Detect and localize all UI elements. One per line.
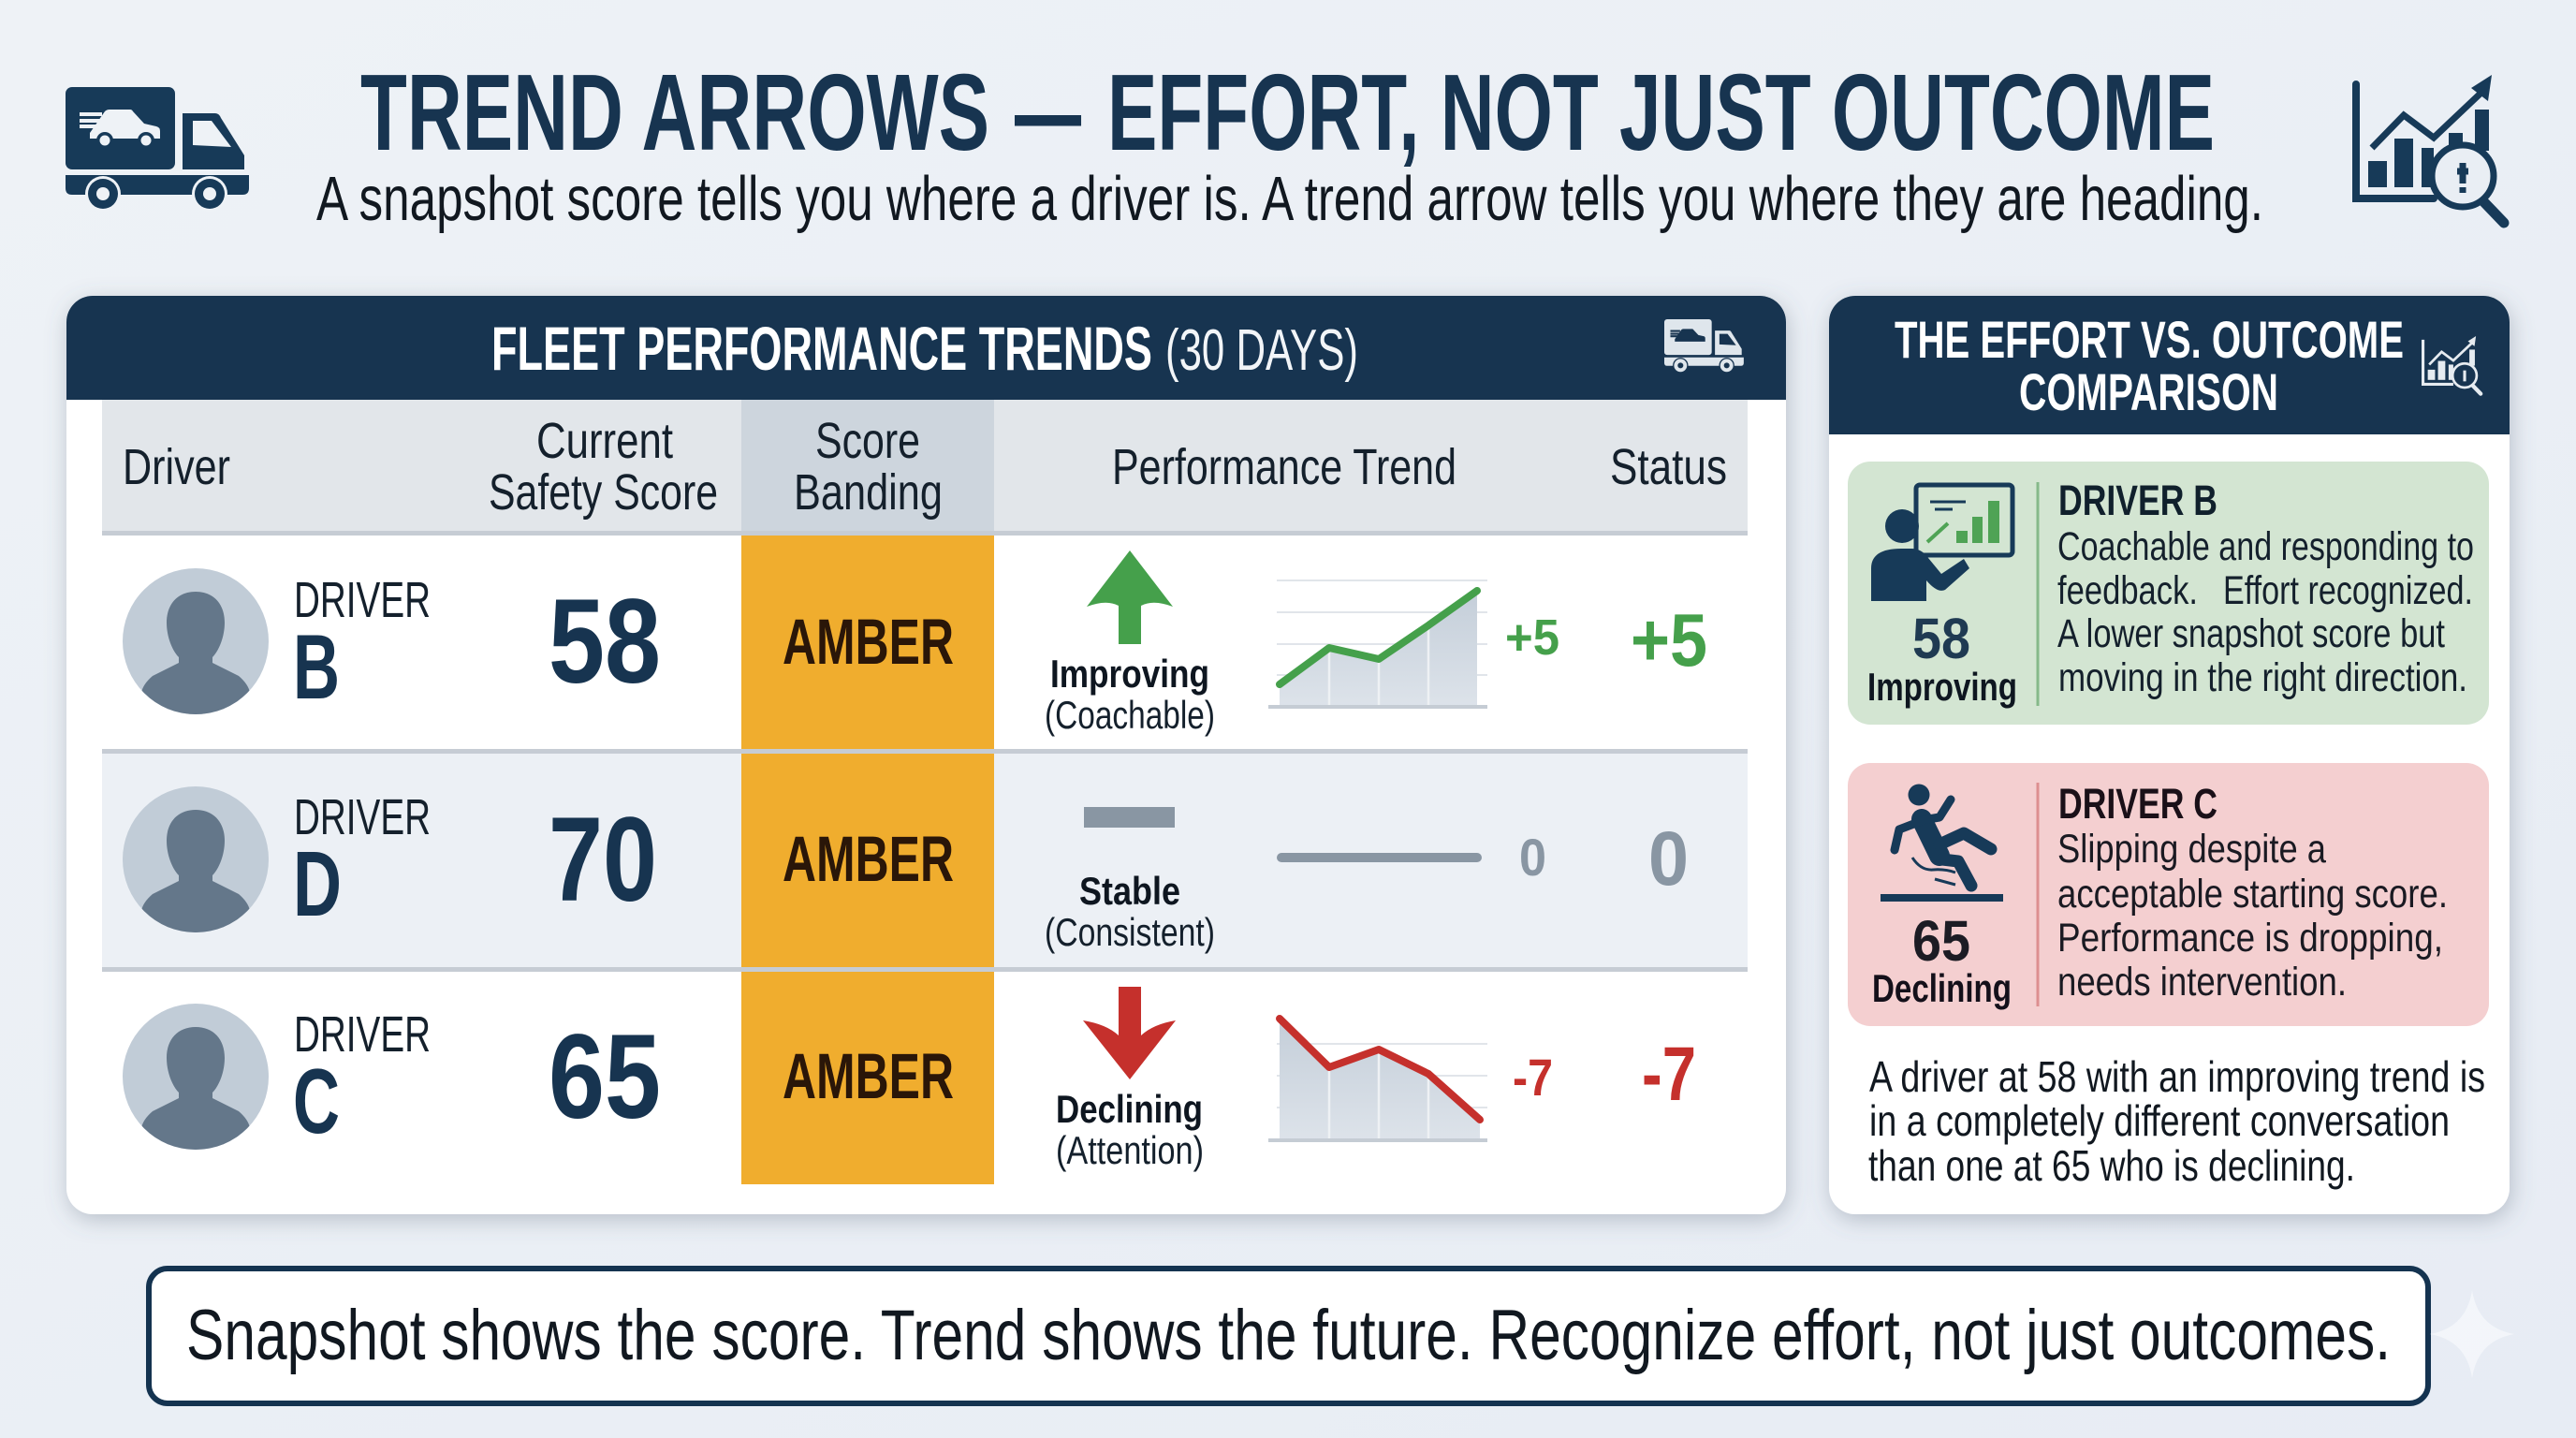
trend label: declining <box>1056 1087 1204 1172</box>
panel heading: COMPARISON <box>2019 362 2278 421</box>
driver C explanation: needs intervention. <box>2057 960 2347 1005</box>
footer callout <box>149 1269 2428 1403</box>
amber band: AMBER <box>783 606 954 678</box>
arrow: declining <box>1083 987 1176 1079</box>
avatar: driver B <box>123 568 269 721</box>
driver B name <box>293 572 431 718</box>
comparison summary text <box>1868 1052 2485 1190</box>
driver B name: DRIVER <box>294 572 431 628</box>
trend label: improving <box>1045 652 1215 737</box>
title: TREND ARROWS <box>360 51 989 173</box>
amber band <box>741 536 994 749</box>
icon: coach at board <box>1871 485 2012 601</box>
driver B name: B <box>293 615 340 718</box>
trend label: improving: (Coachable) <box>1045 693 1215 737</box>
trend label: declining: Declining <box>1056 1087 1203 1131</box>
trend label: improving: Improving <box>1050 652 1209 696</box>
comparison summary text: than one at 65 who is declining. <box>1868 1141 2355 1190</box>
score 65 label: 65 <box>1912 909 1970 973</box>
table header row <box>102 400 1748 536</box>
amber band <box>741 754 994 967</box>
arrow: stable dash <box>1084 807 1175 828</box>
score 70: 70 <box>549 793 657 927</box>
driver D name: DRIVER <box>294 789 431 845</box>
icon: sparkle <box>2430 1290 2514 1378</box>
status -7: -7 <box>1642 1032 1696 1117</box>
icon: person slipping <box>1881 785 2003 902</box>
driver C name <box>293 1006 431 1152</box>
table header row: Status <box>1610 439 1727 495</box>
driver C name: C <box>293 1049 340 1152</box>
sparkline: improving <box>1268 580 1487 707</box>
driver C name: DRIVER <box>294 1006 431 1063</box>
title <box>360 51 2215 173</box>
panel heading: FLEET PERFORMANCE TRENDS <box>491 314 1152 383</box>
trend label: stable: Stable <box>1079 869 1180 913</box>
card: driver C <box>1848 763 2489 1026</box>
trend label: stable <box>1045 869 1215 954</box>
panel heading <box>1895 310 2404 421</box>
sparkline: declining <box>1268 1019 1487 1140</box>
score 65 label <box>1872 909 2012 1010</box>
driver C explanation: DRIVER C <box>2058 780 2217 828</box>
delta -7: -7 <box>1513 1048 1553 1107</box>
status 0: 0 <box>1648 816 1689 902</box>
amber band: AMBER <box>783 823 954 895</box>
table header row: Driver <box>123 439 230 495</box>
driver D name <box>293 789 431 935</box>
trend label: declining: (Attention) <box>1056 1128 1204 1172</box>
driver B explanation: feedback. <box>2057 568 2198 613</box>
driver B explanation: A lower snapshot score but <box>2057 611 2445 656</box>
table header row: Score <box>815 413 920 469</box>
icon: small truck <box>1664 319 1744 374</box>
score 58: 58 <box>549 575 661 709</box>
driver C explanation: Performance is dropping, <box>2057 916 2443 961</box>
amber band: AMBER <box>783 1040 954 1112</box>
table header row: Performance Trend <box>1112 439 1456 495</box>
avatar: driver D <box>123 786 269 939</box>
icon: chart with magnifier <box>2356 75 2504 223</box>
panel heading: (30 DAYS) <box>1165 318 1358 383</box>
driver B explanation: Effort recognized. <box>2223 568 2473 613</box>
panel: fleet performance trends <box>66 296 1786 1214</box>
row: driver D <box>102 749 1748 972</box>
driver B explanation <box>2057 477 2474 700</box>
driver B explanation: moving in the right direction. <box>2058 655 2467 700</box>
delta +5: +5 <box>1505 609 1559 666</box>
panel: effort vs outcome comparison <box>1829 296 2510 1214</box>
score 58 label: Improving <box>1867 665 2017 709</box>
delta 0: 0 <box>1519 828 1546 887</box>
driver B explanation: DRIVER B <box>2058 477 2217 524</box>
driver D name: D <box>293 832 342 935</box>
icon: delivery truck <box>66 87 249 212</box>
arrow: improving <box>1087 550 1173 644</box>
score 58 label <box>1867 607 2017 709</box>
card: driver B <box>1848 462 2489 725</box>
amber band <box>741 972 994 1184</box>
driver B explanation: Coachable and responding to <box>2057 524 2474 569</box>
comparison summary text: in a completely different conversation <box>1869 1096 2450 1145</box>
row: driver C <box>123 972 1696 1184</box>
avatar: driver C <box>123 1004 269 1156</box>
table header row: Safety Score <box>489 464 718 521</box>
sparkline: stable <box>1281 853 1477 862</box>
icon: small chart with magnifier <box>2423 336 2481 394</box>
title: — <box>1015 51 1081 173</box>
score 65 label: Declining <box>1872 966 2012 1010</box>
status +5: +5 <box>1631 598 1707 682</box>
table header row: Current <box>536 413 673 469</box>
score 65: 65 <box>549 1010 661 1144</box>
table header row: Banding <box>794 464 943 521</box>
driver C explanation: Slipping despite a <box>2057 827 2326 872</box>
row: driver B <box>123 536 1707 749</box>
score 58 label: 58 <box>1912 607 1970 670</box>
driver C explanation: acceptable starting score. <box>2057 872 2448 917</box>
trend label: stable: (Consistent) <box>1045 910 1215 954</box>
driver C explanation <box>2057 780 2448 1005</box>
